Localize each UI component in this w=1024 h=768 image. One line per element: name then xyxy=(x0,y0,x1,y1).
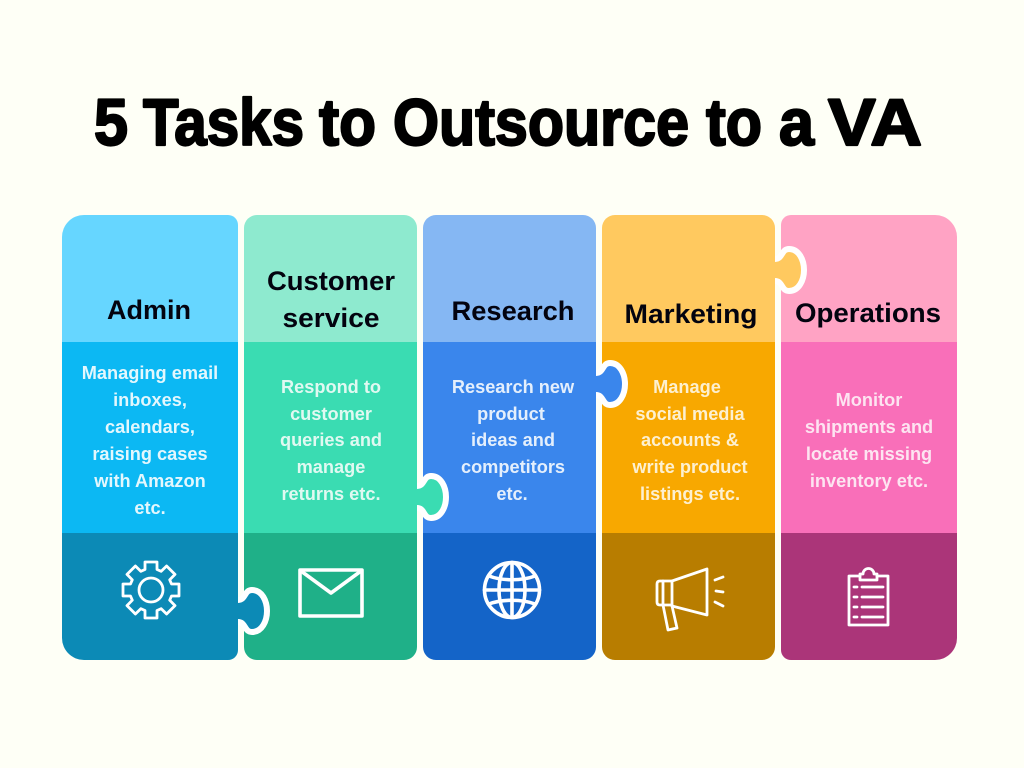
text block: admin: raising cases xyxy=(92,444,208,464)
text block: customer service: returns etc. xyxy=(281,484,381,504)
text block: marketing: listings etc. xyxy=(640,484,740,504)
text block: marketing: social media xyxy=(635,404,745,424)
icon: gear xyxy=(123,562,179,618)
text block: customer service: queries and xyxy=(280,430,382,450)
icon: clipboard xyxy=(849,568,888,625)
text block: admin: inboxes, xyxy=(113,390,187,410)
text block: marketing: Manage xyxy=(653,377,721,397)
text block: operations: locate missing xyxy=(806,444,932,464)
text block: marketing: write product xyxy=(631,457,748,477)
heading: marketing: Marketing xyxy=(624,299,758,329)
heading: operations: Operations xyxy=(795,298,941,328)
text block: marketing: accounts & xyxy=(641,430,739,450)
icon: megaphone xyxy=(657,569,723,630)
puzzle tab: admin to customer service xyxy=(238,590,267,632)
heading: customer service: Customer xyxy=(267,266,395,296)
title: a xyxy=(779,85,815,159)
panel: admin xyxy=(62,215,238,660)
puzzle tab: customer service to research xyxy=(417,476,446,518)
title: VA xyxy=(828,85,922,159)
panel: operations xyxy=(781,215,957,660)
heading: admin: Admin xyxy=(107,295,191,325)
title xyxy=(94,85,922,159)
text block: research: Research new xyxy=(452,377,575,397)
heading: customer service: service xyxy=(282,303,380,333)
text block: admin: Managing email xyxy=(82,363,218,383)
text block: customer service: customer xyxy=(290,404,372,424)
puzzle tab: research to marketing xyxy=(596,363,625,405)
panel: marketing xyxy=(602,215,775,660)
puzzle tab: marketing to operations xyxy=(775,249,804,291)
panel: research xyxy=(423,215,596,660)
text block: research: ideas and xyxy=(471,430,555,450)
text block: research: etc. xyxy=(496,484,528,504)
text block: admin: etc. xyxy=(134,498,166,518)
text block: operations: shipments and xyxy=(805,417,933,437)
icon: envelope xyxy=(300,570,362,616)
title: Outsource xyxy=(393,85,689,159)
heading: customer service xyxy=(267,266,395,333)
title: Tasks xyxy=(143,85,304,159)
text block: customer service: manage xyxy=(297,457,365,477)
text block: admin: calendars, xyxy=(105,417,195,437)
text block: customer service: Respond to xyxy=(281,377,381,397)
icon: globe xyxy=(484,562,540,618)
text block: research: competitors xyxy=(461,457,565,477)
text block: operations: inventory etc. xyxy=(810,471,928,491)
title: to xyxy=(319,85,376,159)
heading: research: Research xyxy=(452,296,574,326)
text block: operations: Monitor xyxy=(836,390,902,410)
text block: research: product xyxy=(477,404,545,424)
title: to xyxy=(706,85,762,159)
title: 5 xyxy=(94,85,128,159)
text block: admin: with Amazon xyxy=(93,471,206,491)
panel: customer service xyxy=(244,215,417,660)
